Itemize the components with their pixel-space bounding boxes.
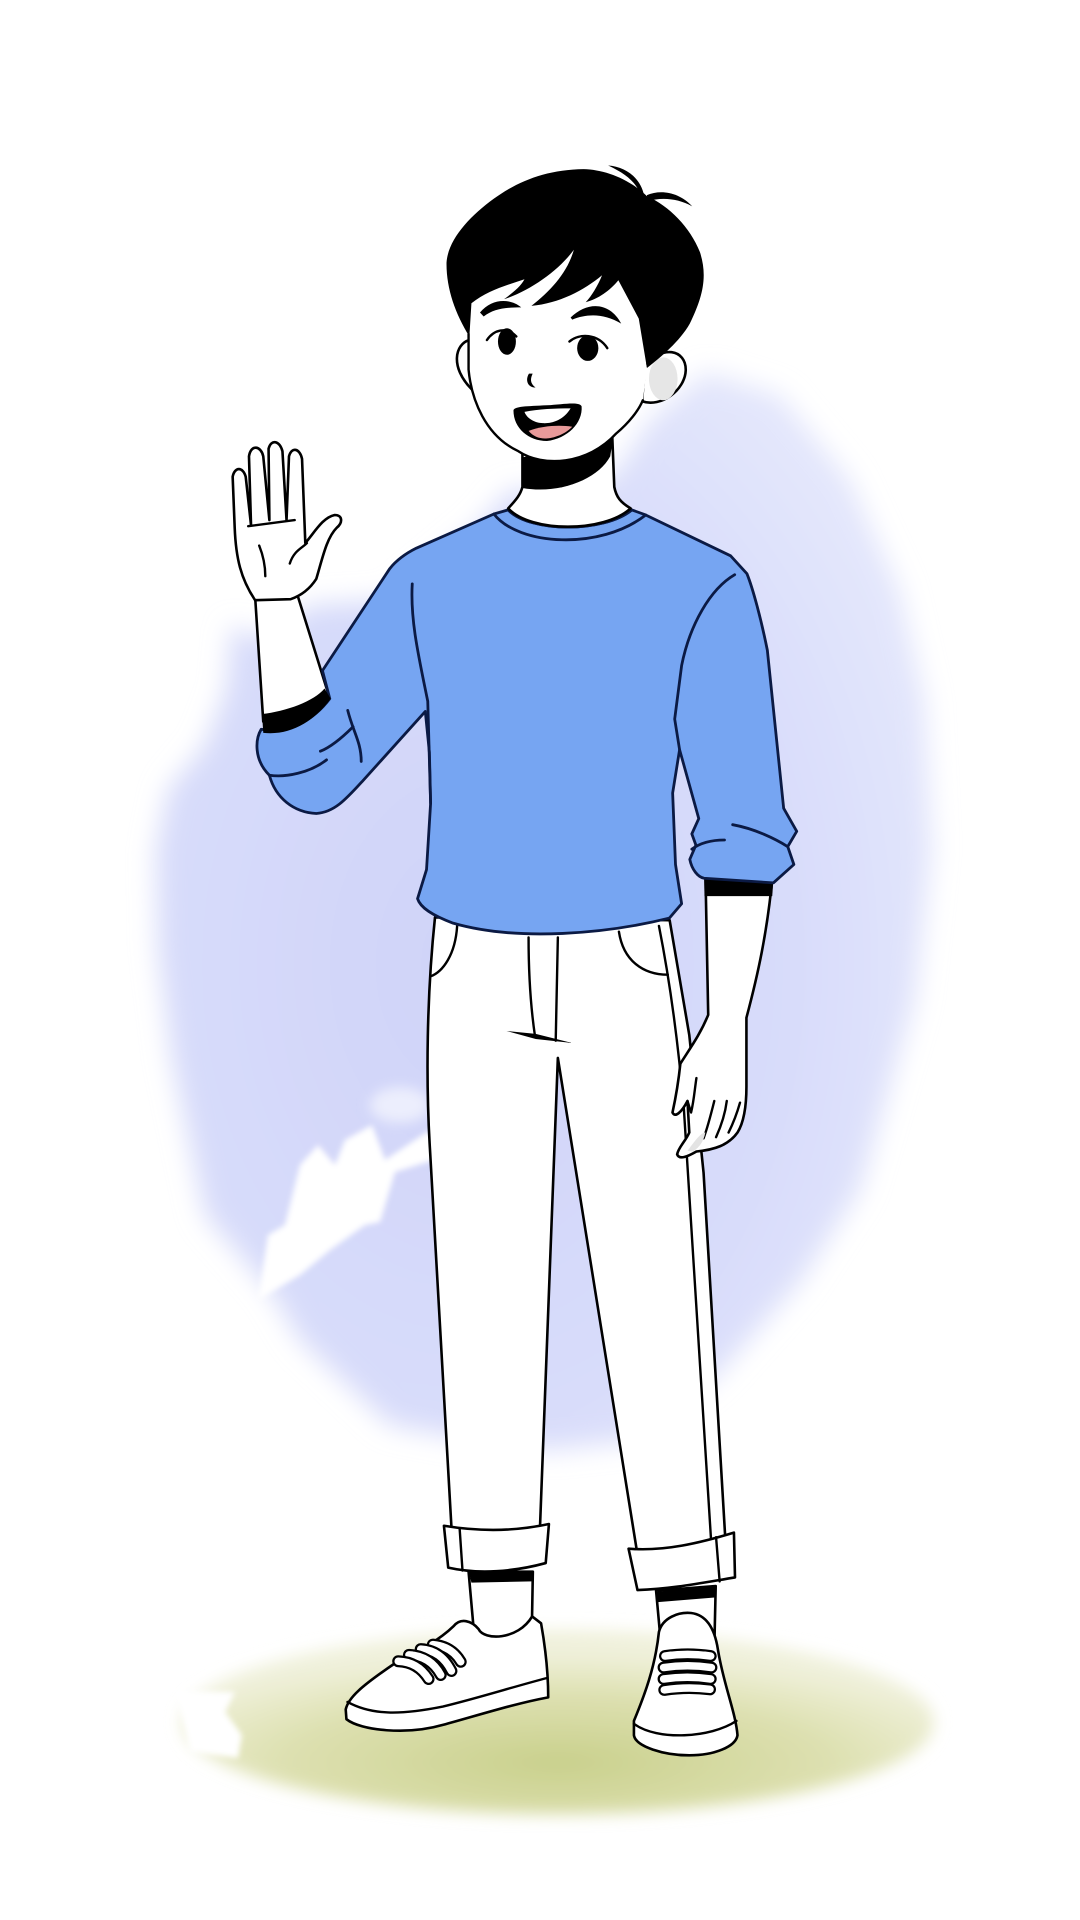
watercolor faint pale patch	[370, 1087, 430, 1123]
trousers	[428, 917, 726, 1566]
right hand and forearm	[672, 869, 773, 1157]
left ankle	[469, 1571, 533, 1652]
face	[469, 268, 647, 461]
right shoe	[634, 1613, 737, 1755]
lower body: legs and shoes	[346, 869, 773, 1755]
waving wrist band	[262, 688, 331, 733]
right forearm band	[704, 875, 773, 896]
neck	[508, 436, 631, 527]
blue sweater	[257, 510, 797, 934]
left ear	[457, 340, 471, 389]
waving forearm	[255, 597, 331, 722]
eyebrows	[480, 301, 621, 324]
watercolor white streak	[258, 1125, 440, 1300]
right trouser cuff	[629, 1533, 735, 1590]
background: olive ground shadow	[175, 1630, 934, 1814]
nose	[527, 374, 536, 387]
ground white brush mark	[175, 1690, 242, 1758]
right ear	[642, 352, 686, 403]
hair	[447, 166, 704, 368]
right ankle	[656, 1586, 716, 1649]
upper body: shirt, arm, head	[233, 166, 797, 934]
mouth	[513, 403, 582, 441]
background: lavender watercolor blob	[156, 372, 932, 1450]
waving hand	[233, 442, 341, 600]
left shoe	[346, 1616, 548, 1731]
eyes	[487, 328, 607, 361]
left trouser cuff	[444, 1524, 549, 1571]
